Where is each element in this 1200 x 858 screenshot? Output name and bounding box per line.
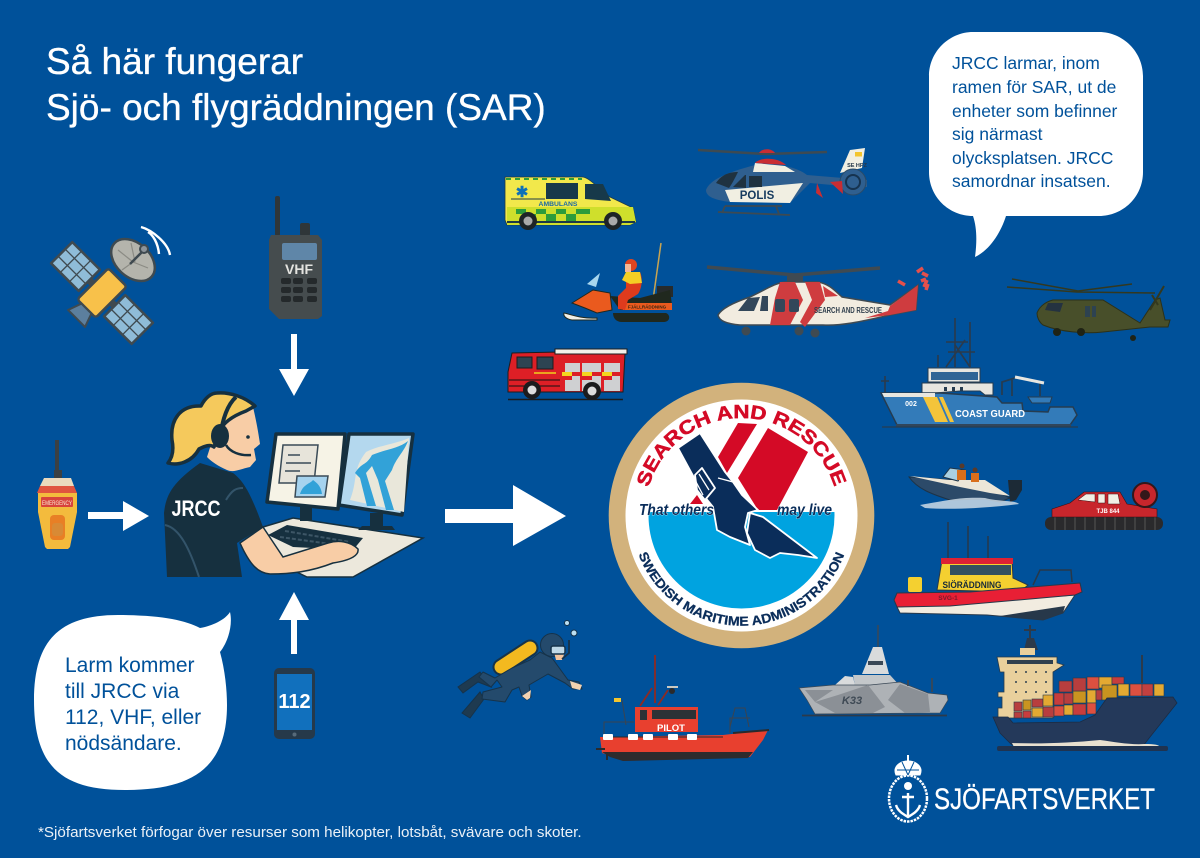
headset — [211, 397, 251, 455]
snowmobile — [564, 243, 673, 322]
speech bubble: alarm — [34, 612, 231, 790]
police helicopter — [698, 148, 868, 215]
neck and face — [207, 406, 260, 471]
corvette — [799, 625, 948, 716]
speech bubble: JRCC alerts: JRCC larmar, inom — [952, 53, 1100, 73]
icon: satellite — [36, 227, 170, 359]
hovercraft: TJB 844 — [1096, 509, 1120, 515]
military helicopter — [1007, 279, 1170, 341]
speech bubble: alarm: till JRCC via — [65, 680, 180, 703]
red flag stripes — [690, 423, 808, 510]
JRCC operator at desk — [164, 393, 423, 577]
sea rescue boat: SIÖRÄDDNING — [942, 580, 1002, 591]
monitor: map — [339, 434, 413, 530]
speech bubble: alarm: nödsändare. — [65, 732, 182, 755]
diver — [458, 620, 582, 718]
icon: VHF radio: VHF — [285, 261, 313, 277]
police helicopter: POLIS — [740, 190, 775, 202]
title — [46, 41, 546, 128]
arrow: beacon to JRCC — [88, 501, 149, 531]
Search and Rescue emblem — [608, 382, 874, 648]
coast guard ship: 002 — [905, 401, 917, 408]
motto — [639, 502, 832, 519]
icon: smartphone 112: 112 — [278, 691, 311, 713]
ambulance — [505, 177, 636, 230]
corvette: K33 — [842, 695, 862, 707]
title: Så här fungerar — [46, 41, 303, 82]
arm — [240, 527, 358, 574]
hair — [168, 393, 255, 464]
hovercraft — [1045, 483, 1163, 530]
snowmobile: FJÄLLRÄDDNING — [628, 304, 667, 310]
jersey label: JRCC — [172, 496, 221, 521]
speech bubble: JRCC alerts: sig närmast — [952, 124, 1043, 144]
crest — [889, 755, 927, 822]
keyboard — [268, 525, 363, 550]
circular subheading: SWEDISH MARITIME ADMINISTRATION — [639, 552, 844, 626]
search and rescue helicopter — [707, 267, 928, 338]
footnote: *Sjöfartsverket förfogar över resurser som helikopter, lotsbåt, svävare och skoter. — [38, 824, 582, 841]
icon: VHF radio — [269, 196, 322, 319]
monitor: document — [267, 434, 345, 521]
coast guard ship — [881, 318, 1078, 427]
fire truck — [508, 349, 627, 400]
speech bubble: JRCC alerts: enheter som befinner — [952, 101, 1118, 121]
motto: may live — [777, 502, 832, 519]
speech bubble: JRCC alerts — [929, 32, 1143, 257]
speech bubble: alarm: Larm kommer — [65, 654, 195, 677]
desk — [263, 518, 423, 577]
speech bubble: JRCC alerts: ramen för SAR, ut de — [952, 77, 1116, 97]
arrow: VHF to JRCC — [279, 334, 309, 396]
container ship — [993, 625, 1177, 751]
shirt — [164, 463, 263, 577]
icon: smartphone 112 — [274, 668, 315, 739]
Sjöfartsverket logo — [889, 755, 1155, 822]
motto: That others — [639, 502, 714, 519]
clasped hands — [678, 433, 817, 558]
speech bubble: JRCC alerts: olycksplatsen. JRCC — [952, 148, 1113, 168]
ambulance: AMBULANS — [539, 201, 578, 208]
speedboat — [909, 464, 1022, 509]
search and rescue helicopter: SEARCH AND RESCUE — [814, 306, 883, 315]
pilot boat: PILOT — [657, 723, 685, 734]
coast guard ship: COAST GUARD — [955, 409, 1025, 420]
icon: emergency beacon — [37, 440, 77, 549]
sea rescue boat — [894, 522, 1082, 620]
arrow: JRCC to Search and Rescue — [445, 485, 566, 546]
sea rescue boat: SVG-1 — [938, 595, 958, 602]
title: Sjö- och flygräddningen (SAR) — [46, 87, 546, 128]
speech bubble: JRCC alerts: samordnar insatsen. — [952, 171, 1111, 191]
icon: emergency beacon: EMERGENCY — [42, 500, 72, 507]
ambulance: ✱ — [516, 184, 529, 201]
arrow: 112 to JRCC — [279, 592, 309, 654]
speech bubble: alarm: 112, VHF, eller — [65, 706, 201, 729]
police helicopter: SE HPZ — [847, 163, 868, 169]
circular heading: SEARCH AND RESCUE — [637, 404, 847, 486]
pilot boat — [596, 655, 769, 761]
